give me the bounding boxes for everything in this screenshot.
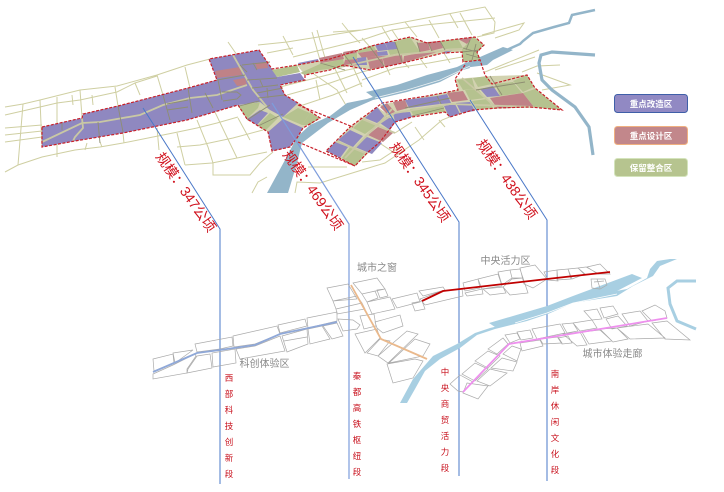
lower map label: central vitality zone: 中央活力区	[480, 254, 530, 267]
vertical label: west technology section: 技	[225, 421, 234, 431]
vertical label: west technology section: 科	[225, 405, 234, 415]
legend: conservation zone: 保留整合区	[630, 163, 673, 173]
upper map: south band district	[380, 75, 562, 122]
district base: hub streets	[238, 102, 320, 151]
vertical label: Qindu rail hub section: 高	[353, 403, 361, 413]
vertical label: west technology section: 创	[225, 437, 233, 447]
lower map: hub route line	[351, 285, 427, 359]
district base: north band streets	[297, 37, 484, 75]
leader line: hub section	[272, 103, 349, 479]
leader line: central section	[353, 57, 459, 476]
leader line: west section	[143, 108, 220, 484]
vertical label: Qindu rail hub section: 铁	[353, 419, 362, 429]
upper map: road network	[5, 7, 570, 193]
upper map: west and hub district	[42, 50, 320, 151]
district base: south band streets	[380, 75, 562, 122]
vertical label: west technology section: 新	[225, 453, 234, 463]
vertical label: central business section: 贸	[441, 415, 449, 425]
vertical label: west technology section: 部	[225, 389, 234, 399]
district: hub conservation plots	[238, 102, 260, 119]
scale label: hub: 规模：469公顷	[280, 147, 346, 233]
legend: key design zone: 重点设计区	[630, 131, 673, 141]
vertical label: central business section	[441, 367, 450, 473]
vertical label: central business section: 央	[441, 383, 450, 393]
lower map label: city window: 城市之窗	[357, 261, 397, 274]
district: hub south	[268, 119, 303, 151]
scale label: west: 规模：347公顷	[153, 149, 219, 235]
vertical label: Qindu rail hub section: 秦	[353, 371, 362, 381]
vertical label: south bank leisure section: 文	[551, 433, 560, 443]
vertical label: central business section: 中	[441, 367, 449, 377]
upper map: internal streets	[42, 40, 534, 158]
vertical label: south bank leisure section: 化	[551, 449, 560, 459]
vertical label: south bank leisure section: 闲	[551, 417, 559, 427]
lower map label: science experience zone: 科创体验区	[240, 357, 290, 370]
vertical label: south bank leisure section: 休	[551, 401, 560, 411]
vertical label: central business section: 活	[441, 431, 450, 441]
district: hub design plots	[215, 67, 242, 78]
vertical label: Qindu rail hub section: 都	[353, 387, 362, 397]
lower map: west route line	[153, 322, 337, 372]
lower map: central route line	[422, 272, 610, 301]
legend: key renovation zone: 重点改造区	[630, 99, 673, 109]
vertical label: central business section: 段	[441, 463, 450, 473]
vertical label: west technology section: 段	[225, 469, 234, 479]
lower map: river	[400, 259, 696, 403]
river: main channel	[267, 62, 470, 193]
leader line: south bank section	[470, 100, 547, 481]
vertical label: west technology section: 西	[225, 373, 233, 383]
vertical label: south bank leisure section	[551, 369, 560, 475]
vertical label: central business section: 商	[441, 399, 449, 409]
vertical label: south bank leisure section: 岸	[551, 385, 560, 395]
lower map: block outlines south bank	[450, 305, 690, 399]
lower river: east tributary	[668, 281, 696, 329]
lower map: south bank route line	[463, 318, 667, 392]
vertical label: south bank leisure section: 段	[551, 465, 560, 475]
upper map: red dashed boundary	[42, 37, 562, 166]
vertical label: Qindu rail hub section: 枢	[353, 435, 362, 445]
upper map: south-west block district	[326, 107, 397, 166]
district base: renovation zone	[42, 50, 305, 147]
lower map label: urban experience corridor: 城市体验走廊	[582, 347, 642, 360]
lower map: block outlines hub	[327, 278, 430, 383]
vertical label: central business section: 力	[441, 447, 449, 457]
lower river: main channel	[400, 259, 677, 403]
vertical label: Qindu rail hub section	[353, 371, 362, 477]
vertical label: west technology section	[225, 373, 234, 479]
district base: south-west block streets	[326, 107, 397, 166]
upper map: north band district	[297, 37, 484, 75]
scale label: south bank: 规模：438公顷	[474, 136, 540, 222]
lower map: block outlines central	[392, 264, 610, 311]
lower map: block outlines west	[153, 312, 343, 379]
vertical label: south bank leisure section: 南	[551, 369, 559, 379]
vertical label: Qindu rail hub section: 纽	[353, 451, 362, 461]
legend	[614, 94, 688, 176]
river: central lake	[366, 47, 513, 97]
scale label: central: 规模：345公顷	[387, 139, 453, 225]
lower river: central lake	[489, 274, 642, 327]
river: north-east tributary	[489, 10, 595, 58]
upper map: river system	[267, 10, 595, 193]
river: east tributary	[539, 52, 595, 155]
vertical label: Qindu rail hub section: 段	[353, 467, 362, 477]
